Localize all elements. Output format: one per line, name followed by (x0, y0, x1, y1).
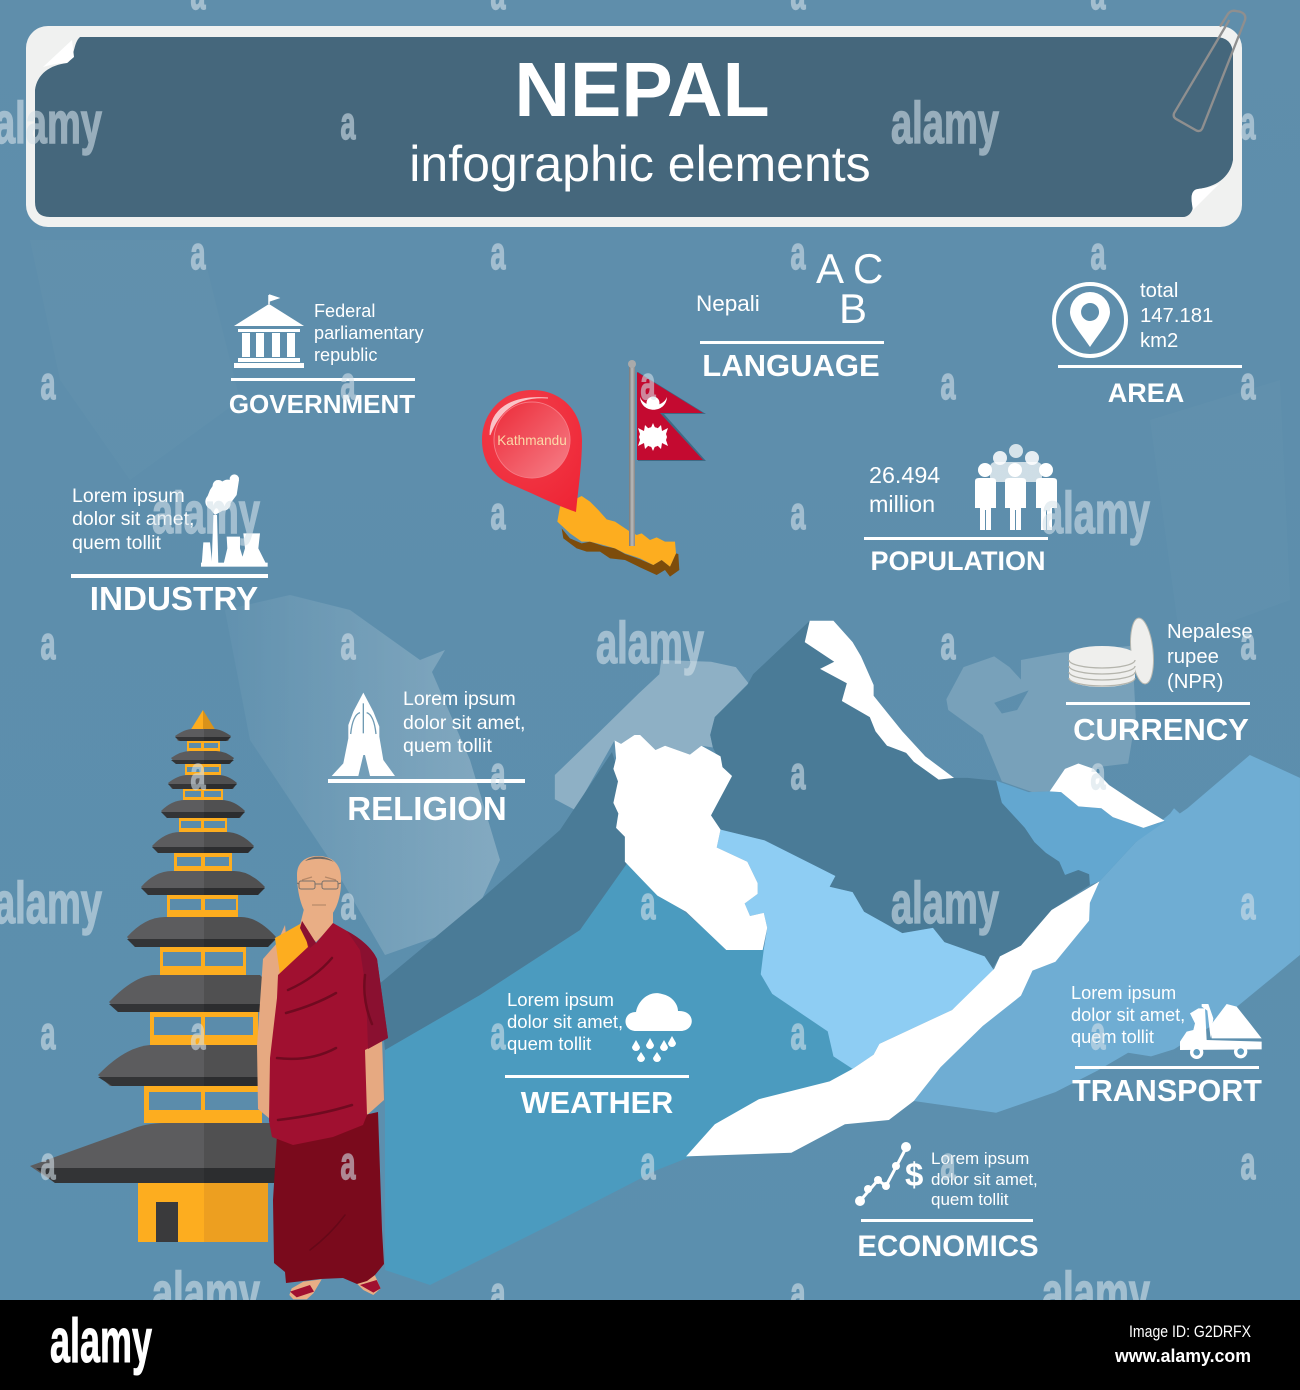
right arm (362, 1038, 384, 1116)
watermarks: alamy (152, 1261, 260, 1326)
subtitle: infographic elements (409, 136, 871, 192)
watermarks: a (790, 227, 806, 279)
pagoda (30, 710, 285, 1242)
mountain: lower left slope (385, 862, 880, 1285)
feet (289, 1272, 381, 1299)
watermarks: alamy (891, 91, 999, 156)
text: industry: Lorem ipsum (72, 485, 185, 507)
mountains (378, 621, 1300, 1285)
watermarks: a (40, 1007, 56, 1059)
watermarks: a (190, 227, 206, 279)
faint world map shapes (30, 240, 1290, 955)
text: government: parliamentary (314, 323, 425, 343)
neck and head (300, 905, 333, 942)
upper robe (269, 921, 388, 1145)
text: language: Nepali (696, 291, 760, 316)
watermarks: a (940, 357, 956, 409)
government block (229, 295, 425, 419)
icon: dump truck (1180, 1004, 1262, 1059)
text: transport: Lorem ipsum (1071, 983, 1176, 1003)
watermarks: a (940, 617, 956, 669)
watermarks: a (40, 1137, 56, 1189)
text: religion: Lorem ipsum (403, 688, 516, 710)
text: government: Federal (314, 301, 375, 321)
watermarks: a (490, 1007, 506, 1059)
mountain: dark main peak (710, 621, 1090, 969)
heading: industry: INDUSTRY (90, 581, 258, 618)
icon: people group (975, 444, 1057, 530)
robe folds (277, 958, 372, 1250)
watermarks: a (490, 487, 506, 539)
watermarks: a (190, 1007, 206, 1059)
icon: growth chart with dollar (855, 1142, 923, 1206)
language block (696, 245, 884, 383)
map pin: Kathmandu: Kathmandu (497, 433, 567, 448)
text: weather: dolor sit amet, (507, 1011, 623, 1032)
icon: letters A C B: C (853, 245, 883, 292)
watermarks: a (340, 97, 356, 149)
weather block (505, 989, 692, 1120)
watermarks: a (1240, 357, 1256, 409)
roof right-half shading (204, 729, 285, 1183)
yellow sash (275, 924, 310, 975)
watermarks: a (790, 487, 806, 539)
watermarks: a (340, 617, 356, 669)
area block (1054, 280, 1242, 408)
text: industry: quem tollit (72, 532, 161, 554)
watermarks: a (1240, 877, 1256, 929)
transport block (1071, 983, 1262, 1108)
icon: praying hands (332, 693, 395, 776)
icon: coins (1069, 617, 1156, 687)
left arm (257, 925, 290, 1119)
religion block (328, 688, 525, 827)
text: population: 26.494 (869, 462, 940, 488)
watermarks: a (640, 877, 656, 929)
mountain: right blue range (914, 755, 1300, 1113)
heading: weather: WEATHER (521, 1086, 673, 1120)
heading: population: POPULATION (870, 546, 1046, 576)
nepal map (557, 496, 679, 577)
spire (190, 710, 203, 731)
watermarks: a (1090, 747, 1106, 799)
heading: area: AREA (1108, 378, 1184, 408)
watermarks: a (640, 357, 656, 409)
icon: letters A C B: A (816, 245, 844, 292)
economics block (855, 1142, 1039, 1263)
mountain: mid blue face (996, 781, 1166, 885)
icon: factory (201, 474, 268, 567)
text: government: republic (314, 345, 377, 365)
glasses and face (297, 881, 341, 889)
watermarks: a (190, 747, 206, 799)
text: religion: dolor sit amet, (403, 712, 525, 734)
tower body (144, 741, 262, 1123)
title: NEPAL (514, 47, 770, 133)
flag pole (629, 366, 635, 546)
watermarks: a (790, 747, 806, 799)
text: economics: dolor sit amet, (931, 1170, 1038, 1189)
text: weather: Lorem ipsum (507, 989, 614, 1010)
watermarks: a (40, 357, 56, 409)
watermarks: a (940, 1137, 956, 1189)
heading: currency: CURRENCY (1073, 712, 1249, 747)
text: currency: Nepalese (1167, 621, 1253, 643)
watermarks: a (490, 747, 506, 799)
text: population: million (869, 491, 935, 517)
watermarks: alamy (152, 481, 260, 546)
footer logo: alamy (50, 1307, 152, 1376)
watermarks: a (790, 1007, 806, 1059)
text: currency: (NPR) (1167, 671, 1223, 693)
text: religion: quem tollit (403, 735, 492, 757)
currency block (1066, 617, 1253, 747)
watermarks: a (340, 1137, 356, 1189)
watermarks: a (340, 877, 356, 929)
heading: language: LANGUAGE (702, 348, 880, 383)
text: industry: dolor sit amet, (72, 508, 194, 530)
monk (257, 856, 388, 1299)
watermarks: alamy (1042, 1261, 1150, 1326)
base (138, 1183, 204, 1242)
text: area: km2 (1140, 330, 1178, 352)
icon: government building (234, 295, 304, 368)
icon: growth chart with dollar: $ (905, 1156, 923, 1193)
watermarks: alamy (596, 611, 704, 676)
heading: transport: TRANSPORT (1072, 1074, 1262, 1108)
heading: religion: RELIGION (347, 790, 507, 827)
watermarks: a (490, 1267, 506, 1319)
flag of Nepal (637, 372, 706, 461)
lower robe (273, 1112, 384, 1284)
watermarks: a (340, 357, 356, 409)
door (156, 1202, 178, 1242)
footer bar (0, 1300, 1300, 1390)
icon: letters A C B: B (839, 285, 867, 332)
watermarks: alamy (1042, 481, 1150, 546)
text: transport: dolor sit amet, (1071, 1005, 1185, 1025)
capital map with flag (482, 360, 706, 577)
text: economics: quem tollit (931, 1190, 1009, 1209)
industry block (71, 474, 268, 618)
population block (864, 444, 1057, 576)
icon: letters A C B (816, 245, 883, 332)
icon: rain cloud (626, 993, 692, 1062)
roofs (30, 729, 285, 1183)
snow caps (613, 621, 1164, 1156)
image id: Image ID: G2DRFX (1129, 1322, 1251, 1341)
text: economics: Lorem ipsum (931, 1149, 1029, 1168)
website: www.alamy.com (1114, 1346, 1251, 1366)
watermarks: alamy (891, 871, 999, 936)
text: weather: quem tollit (507, 1033, 591, 1054)
watermarks: a (1240, 97, 1256, 149)
heading: government: GOVERNMENT (229, 389, 415, 419)
text: area: total (1140, 280, 1178, 302)
watermarks: a (1240, 617, 1256, 669)
watermarks: a (640, 1137, 656, 1189)
watermarks: a (790, 1267, 806, 1319)
header panel (26, 11, 1245, 227)
watermarks: a (1090, 1007, 1106, 1059)
watermarks: a (40, 617, 56, 669)
text: currency: rupee (1167, 646, 1219, 668)
icon: paperclip (1174, 11, 1245, 131)
mountain: dark left ridge (378, 752, 640, 1050)
map pin: Kathmandu (482, 390, 582, 512)
heading: economics: ECONOMICS (857, 1230, 1039, 1263)
tower windows (149, 743, 259, 1110)
watermarks: a (1240, 1137, 1256, 1189)
icon: area map pin (1054, 284, 1126, 356)
mountain: pale blue face (717, 830, 994, 1069)
watermarks: a (1090, 227, 1106, 279)
text: transport: quem tollit (1071, 1027, 1154, 1047)
text: area: 147.181 (1140, 305, 1213, 327)
watermarks: a (490, 227, 506, 279)
